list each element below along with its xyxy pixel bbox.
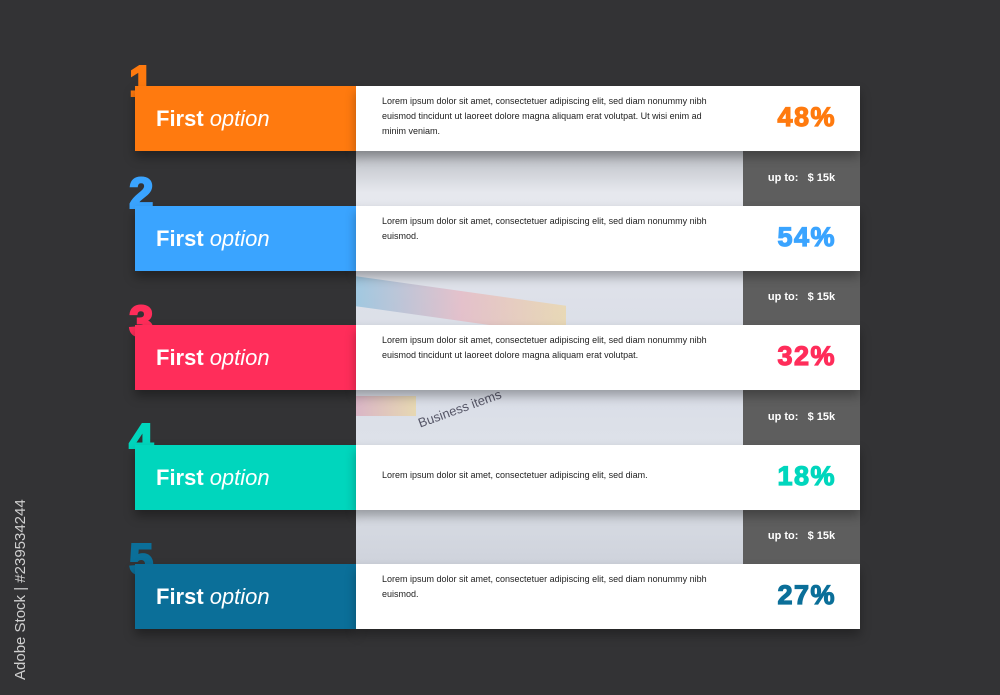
row 1 (135, 86, 356, 151)
grey price boxes (743, 151, 860, 206)
text: up to: $ 15k (768, 530, 835, 542)
side watermark id: Adobe Stock | #239534244 (12, 499, 29, 680)
row 1: option (210, 106, 270, 130)
row 3 (135, 325, 356, 390)
background photo strip (356, 151, 743, 564)
row 3: First (156, 344, 204, 370)
grey price boxes: up to: $ 15k (768, 172, 835, 184)
row 5: First (156, 584, 204, 608)
text: 5 (129, 535, 153, 584)
text: 2 (129, 169, 153, 218)
row 2 (135, 206, 356, 271)
row 4 (135, 445, 356, 510)
text: 3 (129, 297, 153, 346)
row 5: option (210, 584, 270, 608)
text: 4 (129, 415, 153, 464)
numbers: 1 (129, 57, 153, 106)
text: 54% (777, 222, 836, 252)
row 4: option (210, 464, 270, 490)
text: Lorem ipsum dolor sit amet, consectetuer adipiscing elit, sed diam nonummy nibh euismod. (382, 574, 707, 599)
text: up to: $ 15k (768, 291, 835, 303)
row 2: option (210, 226, 270, 250)
text: 18% (777, 461, 836, 491)
text: 27% (777, 580, 836, 610)
text: Lorem ipsum dolor sit amet, consectetuer adipiscing elit, sed diam nonummy nibh euismod. (382, 216, 707, 241)
row 3: option (210, 344, 270, 370)
row 1: First (156, 106, 204, 130)
text: Lorem ipsum dolor sit amet, consectetuer adipiscing elit, sed diam nonummy nibh euismod tincidunt ut laoreet dolore magna aliquam erat volutpat. Ut wisi enim ad minim veniam. (382, 96, 707, 136)
text: 32% (777, 341, 836, 371)
row 4: First (156, 464, 204, 490)
row 5 (135, 564, 356, 629)
text: 48% (777, 102, 836, 132)
row 2: First (156, 226, 204, 250)
text: Lorem ipsum dolor sit amet, consectetuer adipiscing elit, sed diam nonummy nibh euismod tincidunt ut laoreet dolore magna aliquam erat volutpat. (382, 335, 707, 360)
text: Lorem ipsum dolor sit amet, consectetuer adipiscing elit, sed diam. (382, 470, 648, 480)
text: up to: $ 15k (768, 411, 835, 423)
background photo strip: Business items (416, 387, 503, 430)
